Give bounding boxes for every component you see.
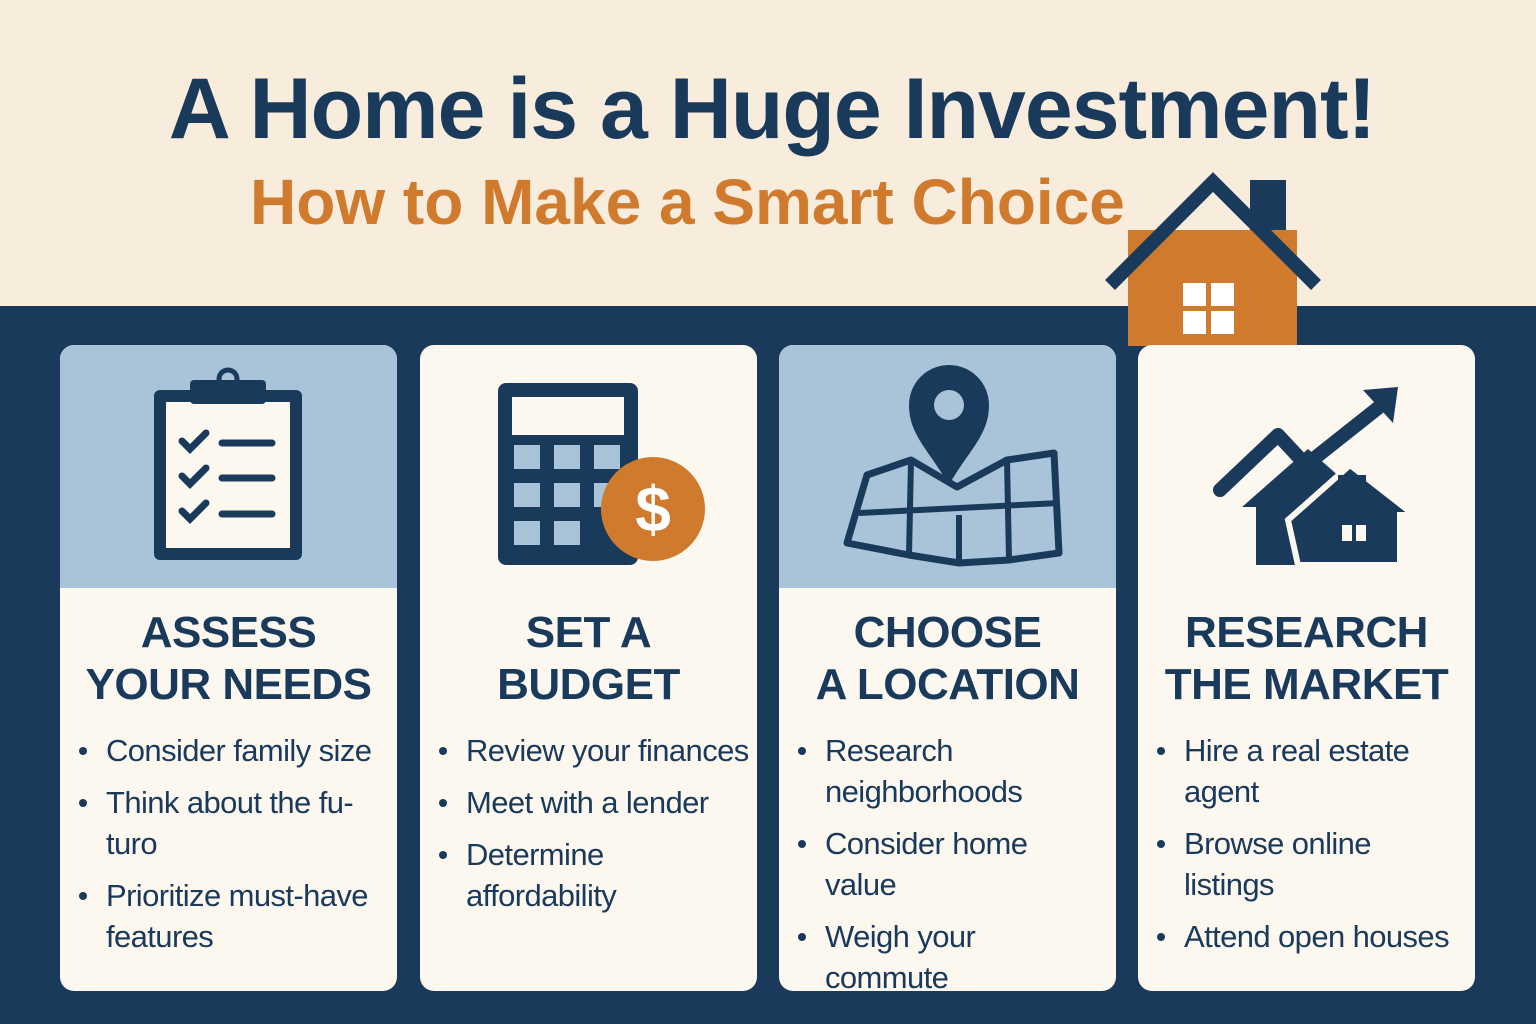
subtitle: How to Make a Smart Choice	[250, 166, 1125, 238]
bullets: listings	[1184, 867, 1274, 902]
bullets: value	[825, 867, 896, 902]
panel: research the market	[1138, 345, 1475, 991]
bullets: neighborhoods	[825, 774, 1022, 809]
heading	[497, 608, 680, 709]
bullets: Browse online	[1184, 826, 1371, 861]
bullets	[439, 733, 749, 913]
heading: A LOCATION	[816, 660, 1079, 709]
bullets: Attend open houses	[1184, 919, 1449, 954]
icon: clipboard	[154, 368, 302, 560]
bullets: Consider home	[825, 826, 1027, 861]
bullets: affordability	[466, 878, 616, 913]
bullets	[1157, 733, 1449, 954]
heading: CHOOSE	[854, 608, 1041, 657]
bullets: Determine	[466, 837, 604, 872]
heading: THE MARKET	[1165, 660, 1448, 709]
icon: house	[1105, 172, 1321, 346]
panel: set a budget	[420, 345, 757, 991]
panel: assess your needs	[60, 345, 397, 991]
heading: RESEARCH	[1185, 608, 1428, 657]
bullets: Think about the fu-	[106, 785, 353, 820]
bullets: agent	[1184, 774, 1259, 809]
heading	[816, 608, 1079, 709]
bullets: Consider family size	[106, 733, 371, 768]
header band	[0, 0, 1536, 306]
bullets: features	[106, 919, 213, 954]
bullets: Hire a real estate	[1184, 733, 1409, 768]
heading	[86, 608, 371, 709]
heading	[1165, 608, 1448, 709]
bullets: Review your finances	[466, 733, 749, 768]
bullets: Weigh your	[825, 919, 975, 954]
bullets: Meet with a lender	[466, 785, 708, 820]
bullets: Prioritize must-have	[106, 878, 368, 913]
icon: calculator: $	[635, 473, 671, 545]
panel: choose a location	[779, 345, 1116, 991]
bullets: Research	[825, 733, 953, 768]
bullets	[798, 733, 1027, 991]
bullets: turo	[106, 826, 157, 861]
heading: SET A	[526, 608, 651, 657]
icon: calculator	[498, 383, 705, 565]
icon: map pin	[844, 365, 1062, 566]
bullets	[79, 733, 371, 954]
heading: BUDGET	[497, 660, 680, 709]
icon: house with rising arrow	[1213, 387, 1406, 565]
heading: ASSESS	[141, 608, 316, 657]
heading: YOUR NEEDS	[86, 660, 371, 709]
title: A Home is a Huge Investment!	[169, 61, 1375, 157]
